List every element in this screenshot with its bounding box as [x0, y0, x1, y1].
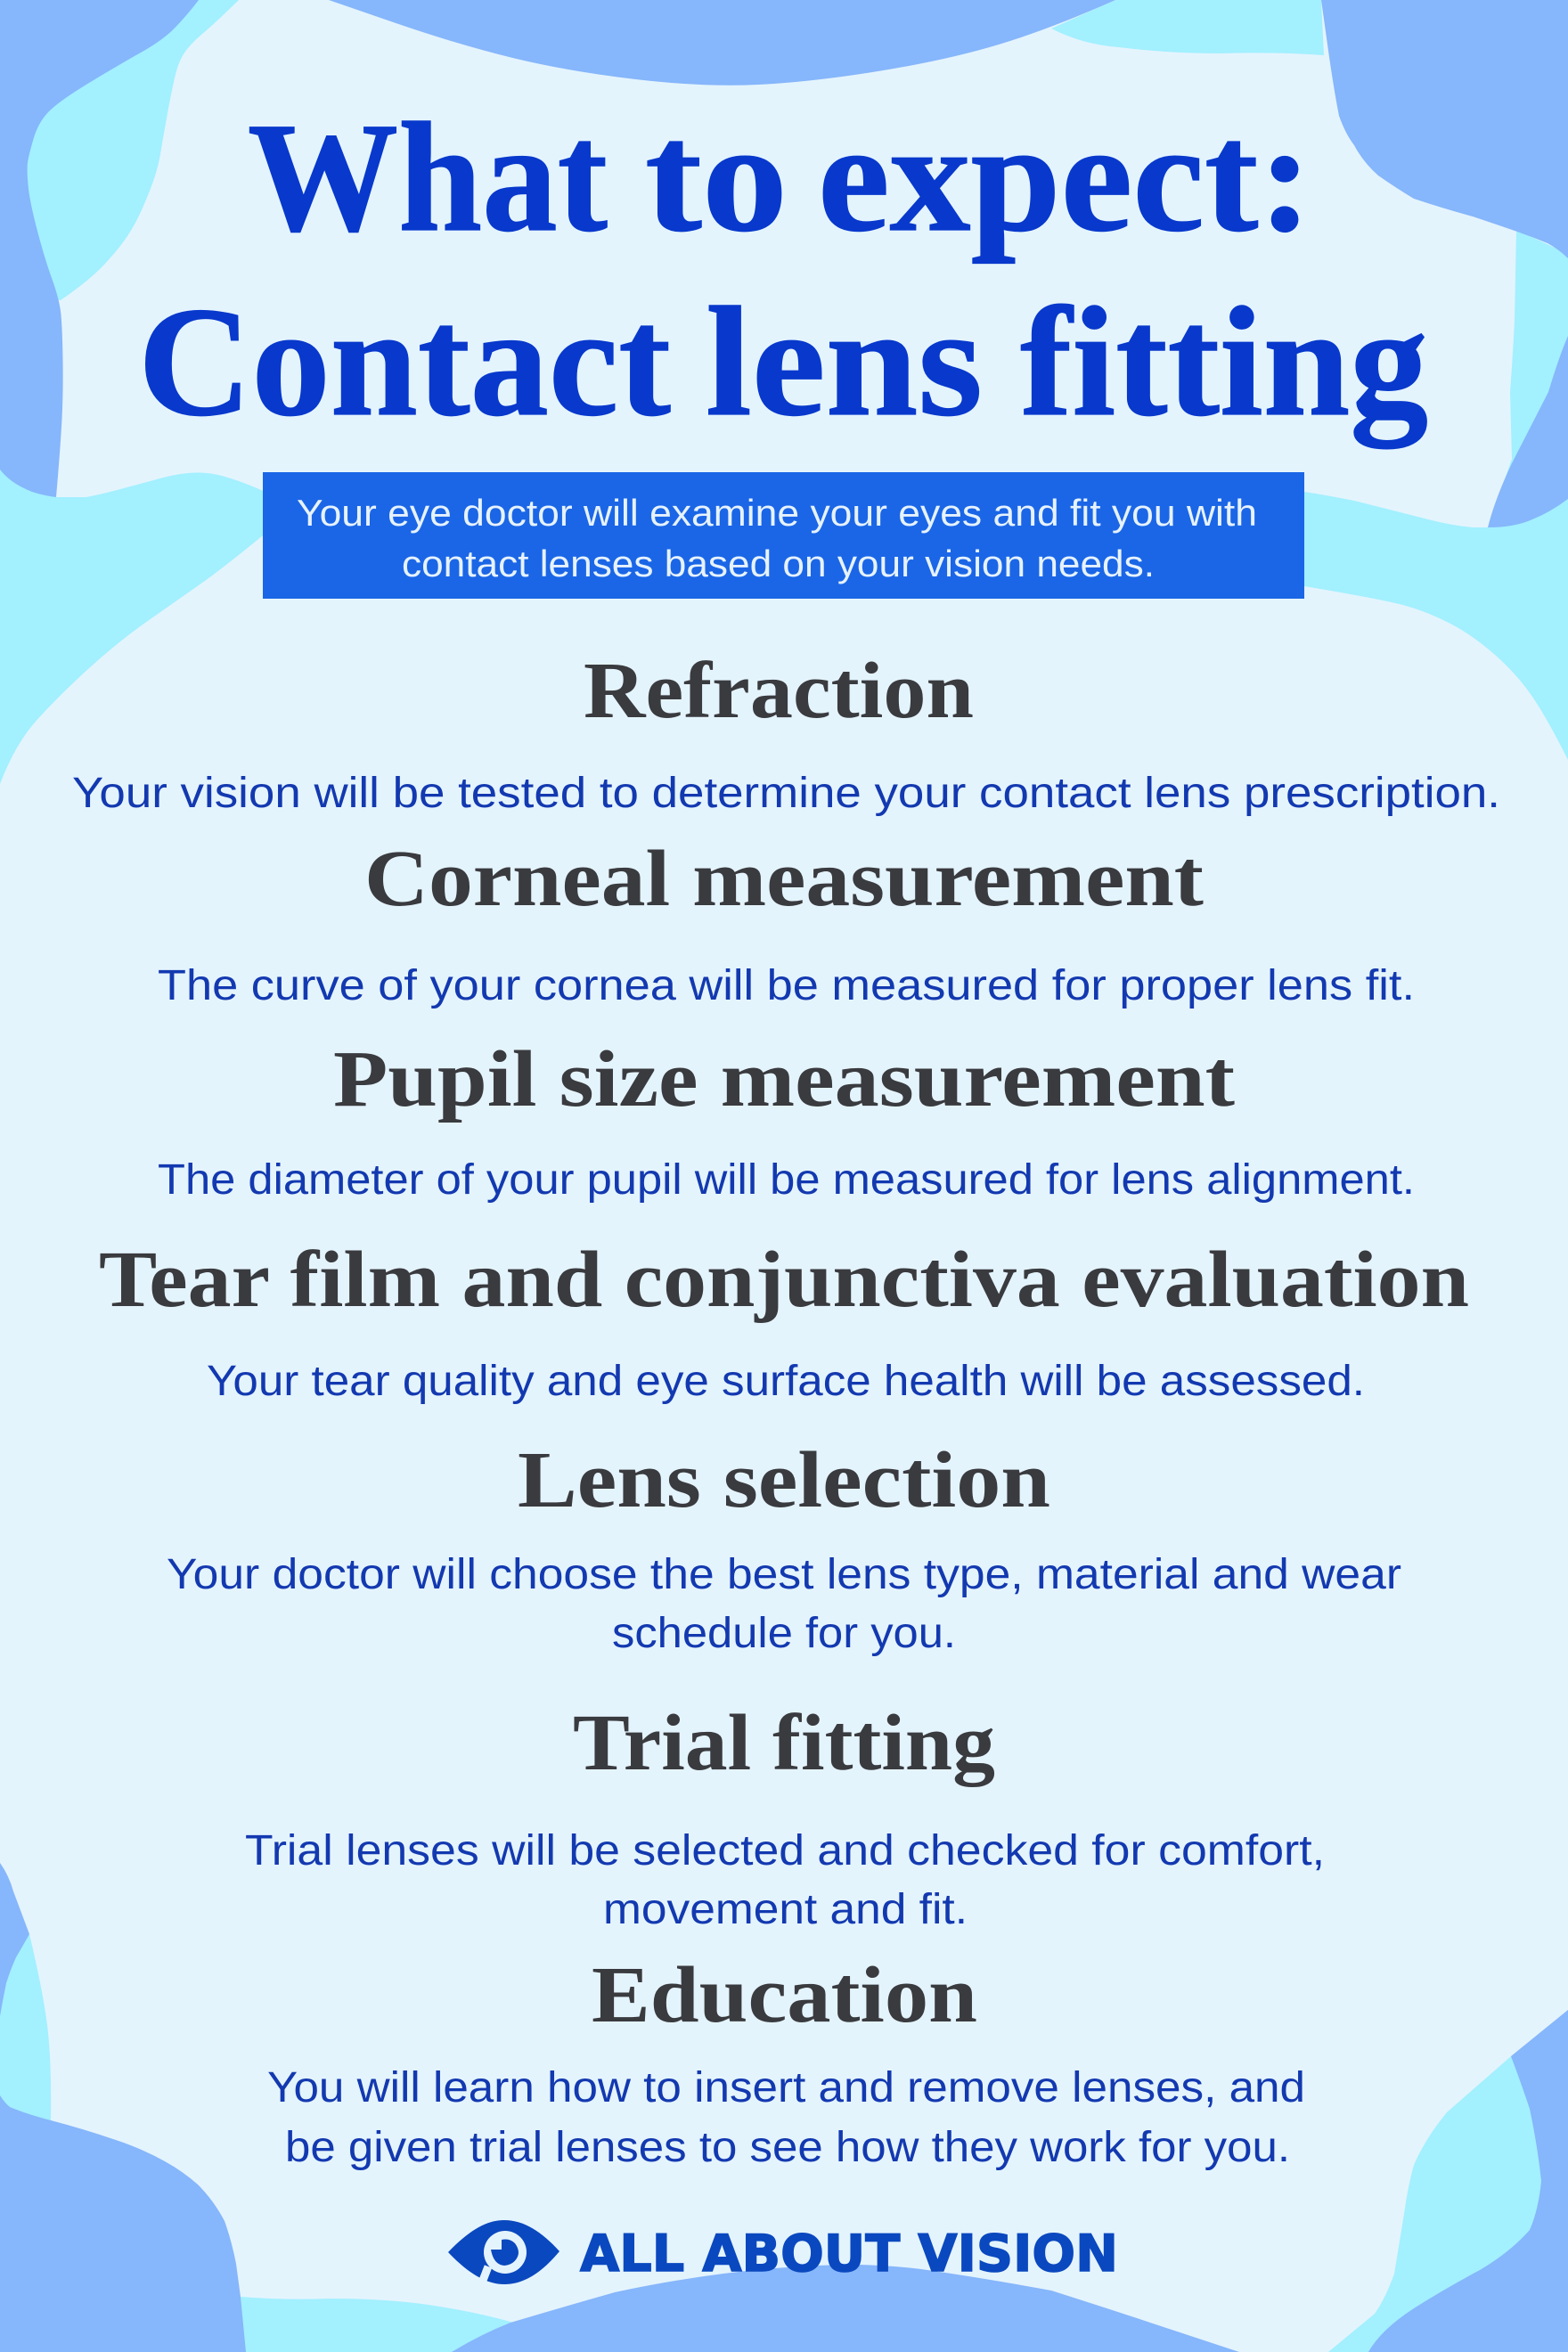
logo: All About Vision [448, 2220, 1118, 2290]
section: refraction: Your vision will be tested to determine your contact lens prescription. [72, 770, 1500, 817]
section: trial fitting: Trial lenses will be selected and checked for comfort, [245, 1827, 1325, 1874]
title: What [248, 91, 608, 265]
section: education [267, 1951, 1305, 2171]
section: lens selection: schedule for you. [612, 1610, 956, 1657]
section: refraction: Refraction [584, 647, 974, 735]
intro banner [263, 472, 1304, 599]
section: refraction [72, 647, 1500, 817]
section: pupil size measurement: Pupil size measurement [333, 1035, 1235, 1123]
title: expect: [818, 91, 1312, 265]
title: lens [706, 275, 983, 449]
section: corneal measurement: The curve of your cornea will be measured for proper lens fit. [158, 962, 1415, 1009]
title: to [645, 91, 788, 265]
section: pupil size measurement [158, 1035, 1415, 1204]
section: trial fitting: movement and fit. [603, 1886, 968, 1933]
intro banner: contact lenses based on your vision needs. [402, 543, 1155, 584]
section: corneal measurement [158, 835, 1415, 1009]
title: Contact [138, 275, 671, 449]
title [138, 91, 1428, 449]
intro banner: Your eye doctor will examine your eyes and fit you with [297, 492, 1257, 534]
section: tear film [99, 1236, 1469, 1405]
section: pupil size measurement: The diameter of your pupil will be measured for lens alignment. [158, 1156, 1415, 1204]
section: education: Education [592, 1951, 977, 2039]
section: lens selection [167, 1436, 1401, 1657]
title: fitting [1020, 275, 1428, 449]
section: lens selection: Your doctor will choose the best lens type, material and wear [167, 1551, 1401, 1598]
section: tear film: Your tear quality and eye surface health will be assessed. [207, 1358, 1365, 1405]
wordmark: ALL ABOUT VISION [580, 2225, 1118, 2283]
section: education: be given trial lenses to see how they work for you. [285, 2124, 1290, 2171]
section: corneal measurement: Corneal measurement [364, 835, 1204, 923]
section: trial fitting: Trial fitting [573, 1699, 995, 1787]
icon: eye [448, 2220, 559, 2290]
section: lens selection: Lens selection [518, 1436, 1050, 1524]
section: trial fitting [245, 1699, 1325, 1933]
section: education: You will learn how to insert and remove lenses, and [267, 2064, 1305, 2111]
section: tear film: Tear film and conjunctiva evaluation [99, 1236, 1469, 1324]
